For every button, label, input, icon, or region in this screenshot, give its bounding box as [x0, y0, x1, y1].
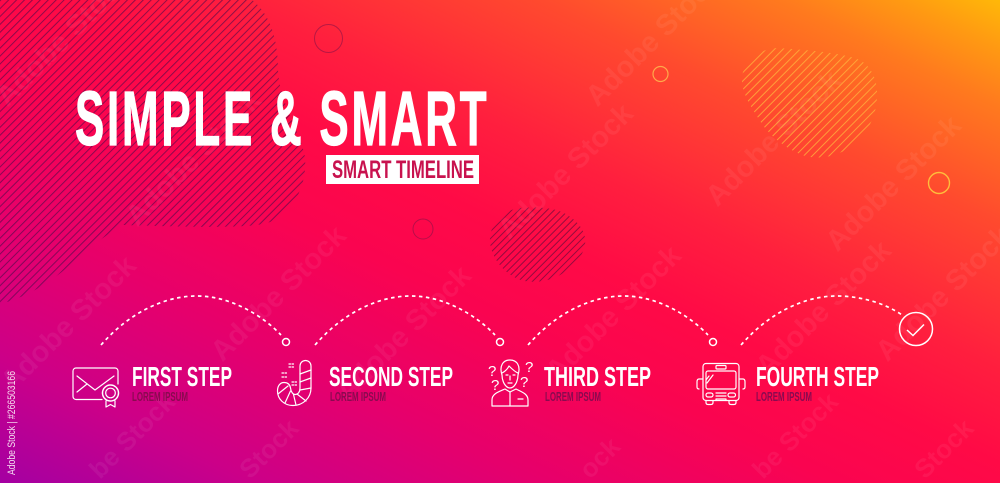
- dotted arc: step two: [315, 296, 495, 345]
- dotted arc: step three: [528, 296, 708, 345]
- icon: certified mail envelope: [73, 368, 118, 407]
- stock watermarks: Adobe Stock: [205, 219, 353, 368]
- stock watermarks: Adobe Stock: [492, 97, 640, 246]
- node: step two: [496, 338, 504, 346]
- stock watermarks: be Stock: [83, 386, 181, 483]
- dotted arc: step one: [101, 296, 281, 345]
- dotted arc: step four: [741, 296, 902, 345]
- icon: confused person: ?: [491, 377, 499, 394]
- step two caption: LOREM IPSUM: [330, 390, 386, 404]
- stock watermarks: Adobe Stock: [820, 109, 968, 258]
- step one heading: FIRST STEP: [132, 361, 232, 392]
- stock watermarks: be Stock: [746, 386, 844, 483]
- subtitle badge: SMART TIMELINE: [332, 156, 474, 184]
- step four heading: FOURTH STEP: [756, 361, 879, 392]
- step three heading: THIRD STEP: [544, 361, 651, 392]
- stock watermarks: Adobe Stock: [700, 64, 848, 213]
- icon: confused person: ?: [520, 374, 528, 391]
- step four caption: LOREM IPSUM: [756, 390, 812, 404]
- hatched blob: small centre: [490, 207, 585, 282]
- decorative circles: [314, 24, 950, 239]
- stock watermarks: Stock: [908, 413, 980, 483]
- stock watermarks: Adobe Stock: [330, 259, 478, 408]
- node: step one: [282, 338, 290, 346]
- hatched blob: orange right: [742, 48, 877, 158]
- step three caption: LOREM IPSUM: [545, 390, 601, 404]
- title: SIMPLE & SMART: [75, 76, 487, 162]
- icon: confused person: [488, 359, 533, 406]
- icon: check mark circle: [900, 312, 932, 346]
- icon: bus: [697, 364, 745, 404]
- hatched blob: large left: [0, 0, 305, 304]
- stock watermarks: Adobe Stock: [540, 239, 688, 388]
- step one caption: LOREM IPSUM: [132, 390, 188, 404]
- stock watermarks: Adobe Stock: [120, 84, 268, 233]
- step two heading: SECOND STEP: [329, 361, 453, 392]
- icon: confused person: ?: [525, 359, 533, 376]
- stock watermarks: ock: [573, 431, 626, 483]
- stock watermarks: Stock: [233, 413, 305, 483]
- icon: candy cane: [278, 360, 311, 406]
- stock watermarks: Adobe Stock: [750, 234, 898, 383]
- node: step three: [710, 338, 716, 346]
- subtitle badge: [326, 155, 479, 184]
- icon: confused person: ?: [488, 363, 496, 380]
- stock credit vertical text: Adobe Stock | #266503166: [6, 371, 18, 475]
